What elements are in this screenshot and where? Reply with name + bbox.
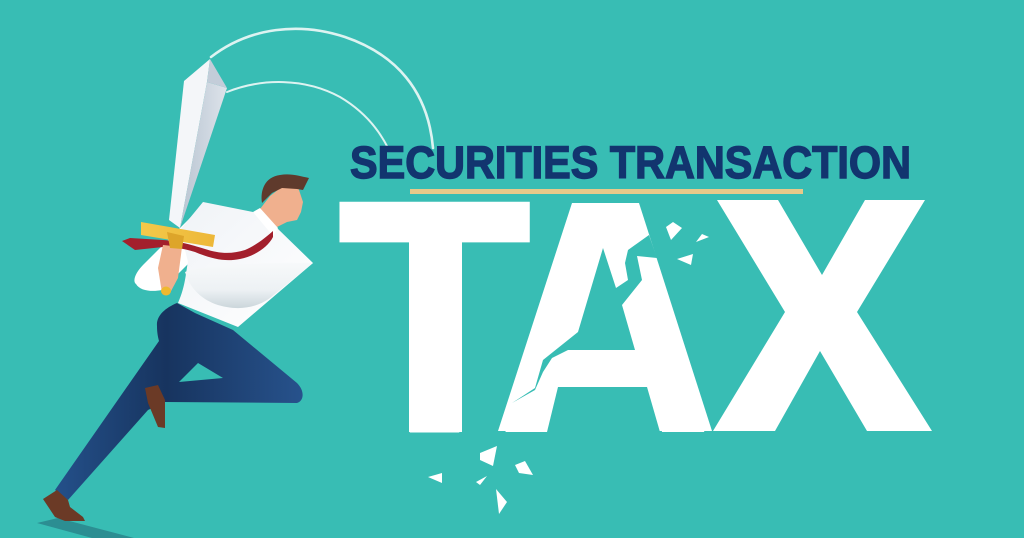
sword pommel [161, 286, 171, 296]
lower opening of A [547, 387, 660, 432]
hand [158, 245, 182, 293]
large word: TAX: X [716, 130, 931, 502]
heading: securities transaction: SECURITIES TRANSACTION [350, 137, 911, 188]
large word: TAX [338, 130, 932, 503]
inner opening and crack through A [512, 235, 657, 403]
large word: TAX: T [338, 133, 531, 501]
letter A body [498, 203, 712, 431]
front shoe [43, 490, 85, 521]
collar [253, 208, 278, 236]
X body weight [713, 200, 932, 431]
shirt shading [185, 263, 313, 308]
figure: businessman with sword [37, 59, 313, 538]
back arm sleeve [134, 203, 205, 291]
hair [262, 174, 309, 203]
neck and face [260, 186, 303, 228]
T stem weight [409, 230, 462, 432]
large word: TAX: A [498, 131, 712, 503]
back shoe [145, 385, 165, 428]
necktie [122, 231, 273, 260]
fragments near top of A [666, 222, 709, 265]
underline [410, 189, 803, 194]
shirt torso [178, 202, 313, 327]
sword [169, 59, 227, 228]
gap between legs [179, 363, 223, 382]
ground shadow [37, 518, 134, 538]
trousers [55, 303, 303, 500]
sword guard [141, 222, 215, 247]
fragments below A [428, 446, 533, 514]
swoosh arcs [211, 29, 433, 148]
